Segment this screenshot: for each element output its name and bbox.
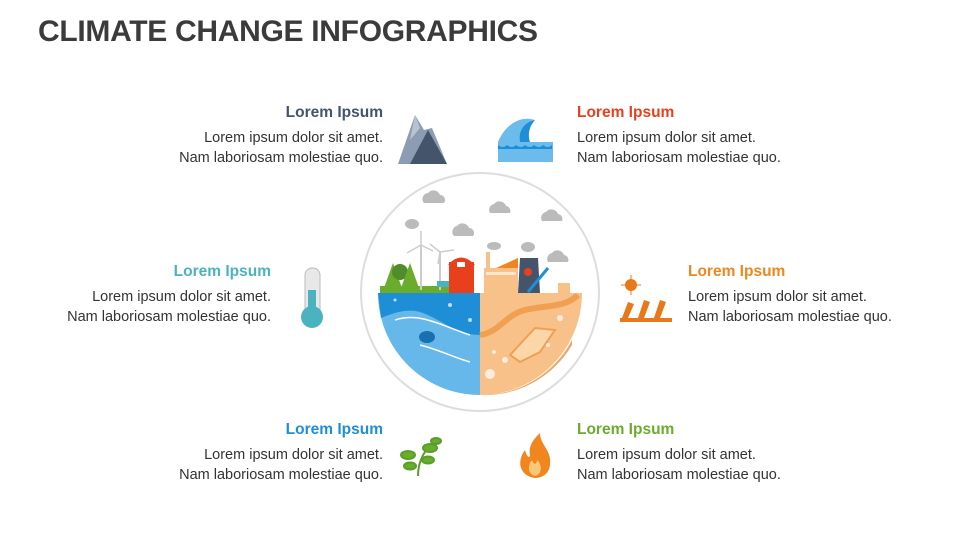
icon: wave bbox=[498, 119, 553, 162]
text block: top left: Lorem Ipsum bbox=[286, 104, 383, 121]
icon: mountain bbox=[398, 115, 447, 164]
text block: top right: Nam laboriosam molestiae quo. bbox=[577, 150, 781, 166]
icon: solar panels bbox=[620, 275, 672, 322]
text block: bottom right bbox=[577, 421, 781, 483]
central circle graphic bbox=[361, 173, 599, 411]
text block: bottom left: Nam laboriosam molestiae quo. bbox=[179, 467, 383, 483]
text block: middle right bbox=[688, 263, 892, 325]
icon: thermometer bbox=[301, 268, 323, 328]
text block: top right bbox=[577, 104, 781, 166]
text block: bottom right: Lorem Ipsum bbox=[577, 421, 674, 438]
text block: bottom left: Lorem ipsum dolor sit amet. bbox=[204, 447, 383, 463]
text block: bottom right: Nam laboriosam molestiae quo. bbox=[577, 467, 781, 483]
text block: top right: Lorem Ipsum bbox=[577, 104, 674, 121]
icon: fire bbox=[520, 433, 550, 478]
text block: middle right: Lorem ipsum dolor sit amet. bbox=[688, 289, 867, 305]
text block: top left: Nam laboriosam molestiae quo. bbox=[179, 150, 383, 166]
text block: middle left: Lorem ipsum dolor sit amet. bbox=[92, 289, 271, 305]
title: CLIMATE CHANGE INFOGRAPHICS bbox=[38, 15, 538, 48]
icon: plant bbox=[401, 438, 441, 476]
text block: top left bbox=[179, 104, 383, 166]
text block: top right: Lorem ipsum dolor sit amet. bbox=[577, 130, 756, 146]
text block: middle left: Lorem Ipsum bbox=[174, 263, 271, 280]
text block: middle left bbox=[67, 263, 271, 325]
text block: middle right: Lorem Ipsum bbox=[688, 263, 785, 280]
text block: bottom left bbox=[179, 421, 383, 483]
text block: middle right: Nam laboriosam molestiae quo. bbox=[688, 309, 892, 325]
text block: top left: Lorem ipsum dolor sit amet. bbox=[204, 130, 383, 146]
text block: bottom right: Lorem ipsum dolor sit amet. bbox=[577, 447, 756, 463]
text block: bottom left: Lorem Ipsum bbox=[286, 421, 383, 438]
text block: middle left: Nam laboriosam molestiae quo. bbox=[67, 309, 271, 325]
